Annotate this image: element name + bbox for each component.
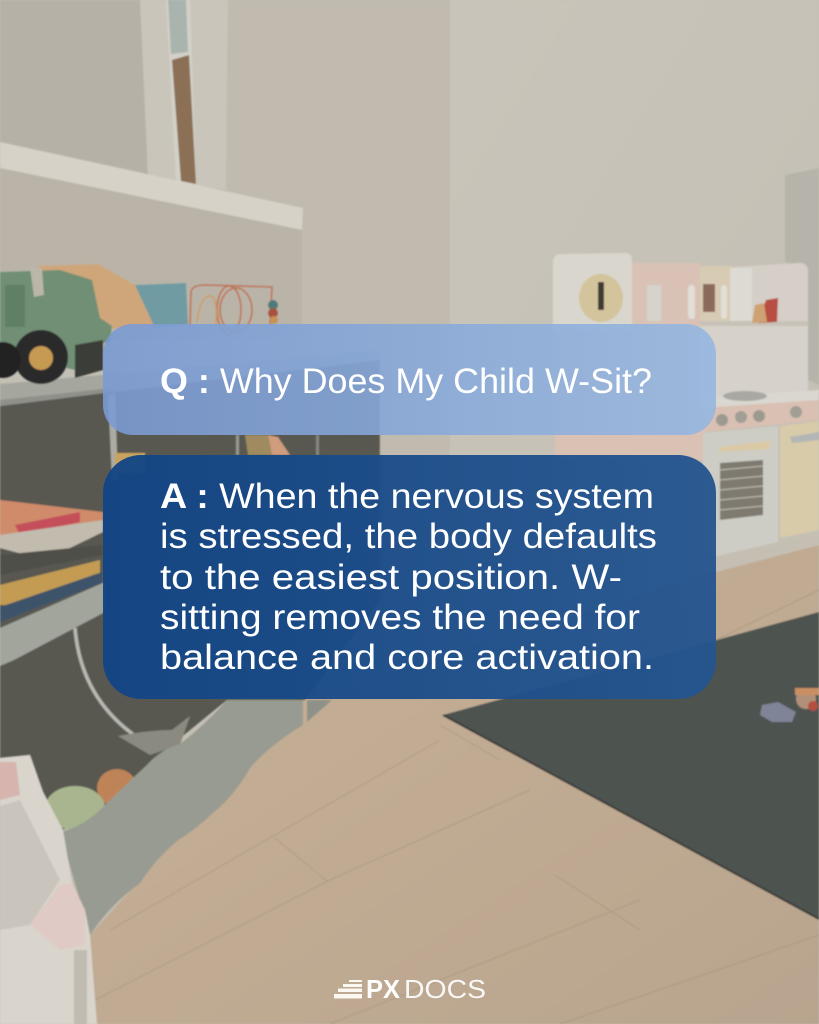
floor [90, 545, 819, 1024]
crib [0, 755, 97, 1024]
question panel background [103, 324, 716, 435]
bead [268, 300, 278, 324]
curved shelf divider [75, 628, 155, 752]
toy seen between panels [236, 435, 319, 455]
icon: stacked steps [334, 980, 362, 998]
question panel [103, 324, 716, 435]
answer text: to the easiest position. W- [160, 558, 622, 597]
window ledge [0, 142, 303, 230]
question text: Q : Why Does My Child W-Sit? [160, 362, 652, 401]
middle shelf [0, 582, 105, 666]
toy truck [0, 264, 188, 384]
wavy side panel [60, 700, 303, 935]
answer text: sitting removes the need for [160, 598, 640, 637]
answer text [160, 477, 657, 677]
right wall [445, 0, 819, 620]
logo: PX DOCS [334, 974, 486, 1004]
books [0, 500, 103, 622]
orange toy behind panel [115, 453, 145, 473]
answer text: A : When the nervous system [160, 477, 654, 516]
play kitchen [553, 253, 819, 572]
shelf upright [108, 393, 118, 480]
top shelf [0, 350, 380, 406]
answer text: is stressed, the body defaults [160, 517, 657, 556]
rug [443, 612, 819, 919]
middle wall [215, 0, 450, 620]
answer text: balance and core activation. [160, 638, 654, 677]
toys on rug [760, 688, 819, 722]
window frame [140, 0, 228, 190]
shelf unit dark back [0, 352, 380, 830]
answer panel [103, 455, 716, 699]
floor plank lines [95, 590, 819, 1024]
logo wordmark: PX [366, 974, 401, 1004]
answer panel background [103, 455, 716, 699]
small panel segment [307, 700, 332, 722]
logo: PX DOCS: DOCS [404, 974, 486, 1004]
upper left wall [0, 0, 150, 180]
bin toys [45, 716, 190, 830]
right wall corner shadow [785, 168, 819, 385]
wire bead maze toy [190, 285, 272, 334]
lower left wall [0, 168, 302, 340]
